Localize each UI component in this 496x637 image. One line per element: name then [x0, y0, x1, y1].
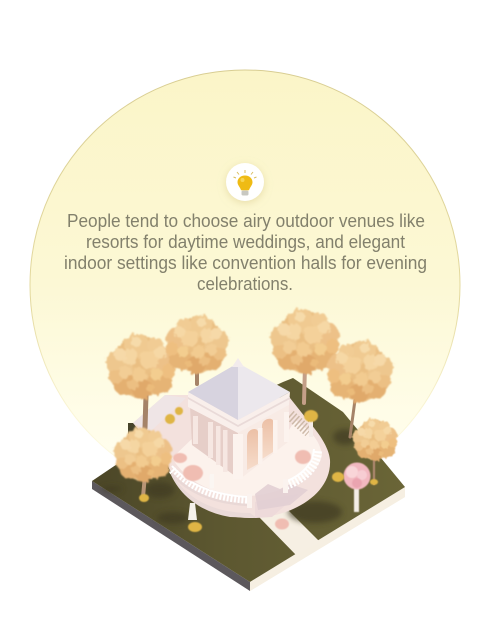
balustrade: [172, 449, 318, 508]
text block: People tend to choose airy outdoor venues like: [67, 211, 425, 231]
terrace shadows: [255, 484, 308, 510]
terrace platform: [133, 395, 330, 518]
ground slab: [92, 378, 405, 591]
roof: [188, 363, 238, 420]
figure: person on terrace: [210, 474, 214, 488]
text block: celebrations.: [197, 274, 293, 294]
text block: resorts for daytime weddings, and elegant: [86, 232, 405, 252]
tree: front left: [114, 427, 172, 482]
walkway: [258, 510, 320, 555]
arches: [247, 429, 258, 470]
pink flower bushes: [173, 450, 311, 530]
tree: back right: [270, 308, 340, 375]
tree: back left: [106, 333, 176, 400]
tree: far right: [327, 340, 393, 403]
text block: indoor settings like convention halls for evening: [64, 253, 427, 273]
tree trunks: [143, 365, 374, 497]
lawn shadows: [102, 429, 357, 524]
isometric wedding venue illustration: [92, 308, 405, 591]
pavilion: [188, 358, 290, 479]
text block: [64, 211, 427, 294]
statue with pink blossom bush: [344, 462, 370, 512]
left facade: [190, 406, 238, 478]
icon: light bulb: [226, 163, 264, 201]
yellow shrubs: [139, 407, 378, 532]
figure: person on lawn: [188, 503, 197, 520]
tree: right small: [353, 418, 397, 461]
back railing: [290, 415, 309, 432]
tree: back centre: [166, 315, 228, 374]
background circle: [30, 70, 460, 500]
entablature: [188, 392, 290, 433]
right facade: [238, 405, 289, 479]
